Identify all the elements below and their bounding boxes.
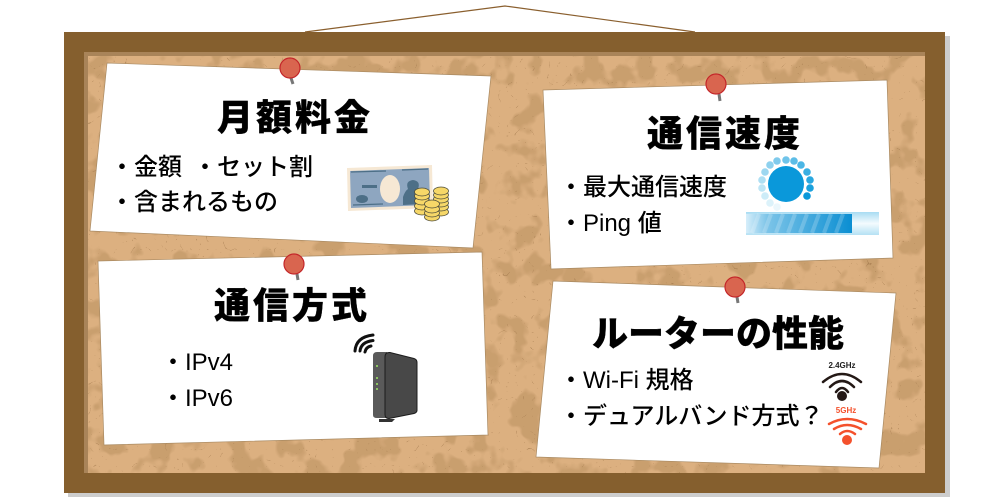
pin xyxy=(284,254,304,280)
text: セット割: ・セット割 xyxy=(193,154,313,181)
icon: progress bar xyxy=(746,212,879,235)
panel: ルーターの性能 xyxy=(536,277,896,468)
icon: loading spinner xyxy=(758,156,814,211)
text: IPv6: ・IPv6 xyxy=(161,385,233,412)
text: デュアルバンド方式？: ・デュアルバンド方式？ xyxy=(559,402,823,430)
pin xyxy=(280,58,300,84)
text: 含まれるもの: ・含まれるもの xyxy=(110,189,278,216)
text: 最大通信速度: ・最大通信速度 xyxy=(559,174,727,201)
hanging wire xyxy=(305,6,695,32)
icon: 2.4GHz wifi xyxy=(823,361,861,401)
icon: 5GHz wifi: 5GHz xyxy=(836,406,856,415)
panel: 通信方式 xyxy=(98,252,488,445)
pin xyxy=(706,74,726,101)
pin xyxy=(725,277,745,303)
heading: 通信方式: 通信方式 xyxy=(214,285,370,326)
panel: 通信速度 xyxy=(543,74,893,269)
heading: ルーターの性能: ルーターの性能 xyxy=(592,313,844,354)
icon: banknote and coins xyxy=(347,165,448,221)
heading: 通信速度: 通信速度 xyxy=(647,113,803,154)
icon: 5GHz wifi xyxy=(829,406,866,445)
panel: 月額料金 xyxy=(90,58,491,248)
heading: 月額料金: 月額料金 xyxy=(217,97,373,138)
text: IPv4: ・IPv4 xyxy=(161,349,233,376)
icon: 2.4GHz wifi: 2.4GHz xyxy=(828,361,856,370)
text: Wi-Fi 規格: ・Wi-Fi 規格 xyxy=(559,367,694,394)
text: 金額: ・金額 xyxy=(110,154,182,181)
icon: wifi router xyxy=(355,335,417,422)
text: Ping 値: ・Ping 値 xyxy=(559,210,662,237)
